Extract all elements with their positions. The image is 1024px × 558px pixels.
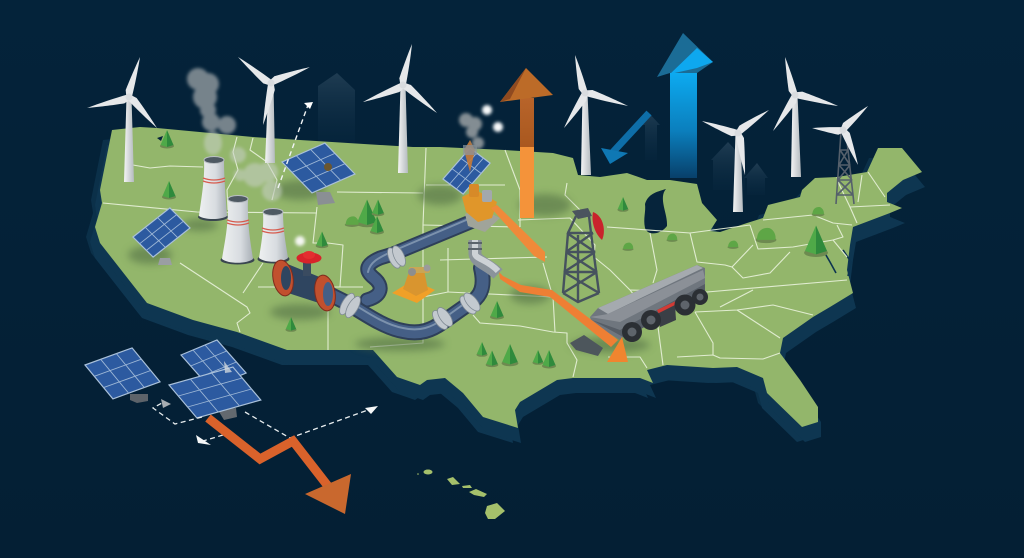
icon: solar panel Idaho xyxy=(282,143,355,205)
dashed white arrows offshore xyxy=(153,403,368,441)
icon: cooling tower 2 xyxy=(220,196,254,264)
icon: solar panel Nebraska xyxy=(443,140,490,194)
icon: wind turbine 1 xyxy=(86,56,161,182)
icon: wind turbine 3 xyxy=(362,43,440,173)
orange flow arrow to Gulf xyxy=(499,272,628,362)
smoke plumes from cooling towers xyxy=(187,68,305,246)
icon: wind turbine 2 xyxy=(235,55,311,163)
icon: tall orange up arrow xyxy=(500,68,553,218)
icon: solar panel west coast xyxy=(133,208,190,265)
icon: wind turbine 6 xyxy=(771,56,839,177)
icon: orange zig-zag down arrow xyxy=(208,418,351,514)
icon: oil derrick xyxy=(563,208,604,302)
icon: ghost arrows behind the map xyxy=(318,73,768,195)
pipeline xyxy=(327,215,483,332)
icon: cooling tower 3 xyxy=(258,208,290,264)
icon: wind turbine 5 xyxy=(700,106,771,212)
icon: orange pipe junction xyxy=(462,184,500,232)
cooling towers xyxy=(198,156,290,264)
trees on the western map xyxy=(160,130,384,332)
icon: tanker truck xyxy=(570,265,708,356)
Hawaii islands xyxy=(417,470,505,519)
pipe couplings xyxy=(337,244,483,332)
icon: offshore solar panel 2 xyxy=(181,340,246,388)
trees on the southern and eastern map xyxy=(476,197,828,368)
smoke puffs in the north xyxy=(459,105,503,149)
icon: wind turbine 4 xyxy=(562,54,630,175)
dashed arrow from solar panel xyxy=(278,102,313,188)
orange flow arrow from junction xyxy=(491,205,545,262)
dashed arrow heads xyxy=(161,399,378,445)
icon: silver faucet pipe xyxy=(468,240,498,274)
state lines xyxy=(103,137,890,377)
icon: offshore solar panel 1 xyxy=(85,348,160,403)
offshore solar array xyxy=(85,340,261,420)
icon: offshore solar panel 3 xyxy=(169,361,261,420)
icon: cooling tower 1 xyxy=(198,156,228,221)
icon: lattice wind turbine 7 xyxy=(812,102,870,204)
lakes and bays xyxy=(157,136,667,233)
icon: red pipeline valve xyxy=(270,251,338,312)
map of the United States xyxy=(86,127,925,443)
ground shadows under objects xyxy=(128,180,650,353)
icon: orange pump xyxy=(392,264,435,303)
icon: large blue up arrow xyxy=(657,33,713,178)
icon: blue diagonal arrow xyxy=(601,113,649,164)
